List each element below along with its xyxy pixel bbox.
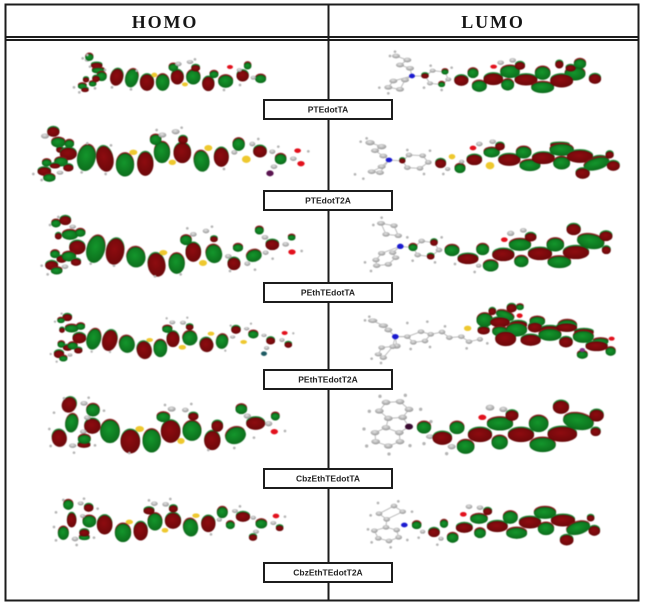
compound label: PEthTEdotTA [264,283,392,302]
compound label: CbzEthTEdotT2A: CbzEthTEdotT2A [293,568,363,578]
orbital: CbzEthTEdotTA HOMO [48,395,286,454]
compound label: PTEdotTA [264,100,392,119]
column heading: HOMO: HOMO [132,12,198,32]
orbital: CbzEthTEdotTA LUMO [362,394,603,456]
orbital: PTEdotT2A HOMO [32,126,310,181]
orbital: PEthTEdotTA HOMO [40,216,303,278]
orbital: PEthTEdotT2A LUMO [364,305,615,364]
compound label: PTEdotT2A [264,191,392,210]
compound label: PTEdotT2A: PTEdotT2A [305,196,351,206]
compound label: CbzEthTEdotTA: CbzEthTEdotTA [296,474,360,484]
compound label: PTEdotTA: PTEdotTA [308,104,348,114]
orbital: CbzEthTEdotT2A LUMO [367,500,600,549]
orbital: PTEdotTA LUMO [378,50,601,95]
compound label: CbzEthTEdotT2A [264,563,392,582]
compound label: PEthTEdotT2A: PEthTEdotT2A [298,374,358,384]
orbital: PEthTEdotTA LUMO [364,216,612,273]
orbital: PEthTEdotT2A HOMO [49,312,294,363]
orbital: PTEdotT2A LUMO [354,137,619,180]
compound label: CbzEthTEdotTA [264,469,392,488]
orbital: CbzEthTEdotT2A HOMO [53,497,286,546]
orbital: PTEdotTA HOMO [73,54,266,94]
compound label: PEthTEdotT2A [264,370,392,389]
column heading: LUMO: LUMO [461,12,525,32]
compound label: PEthTEdotTA: PEthTEdotTA [301,288,355,298]
